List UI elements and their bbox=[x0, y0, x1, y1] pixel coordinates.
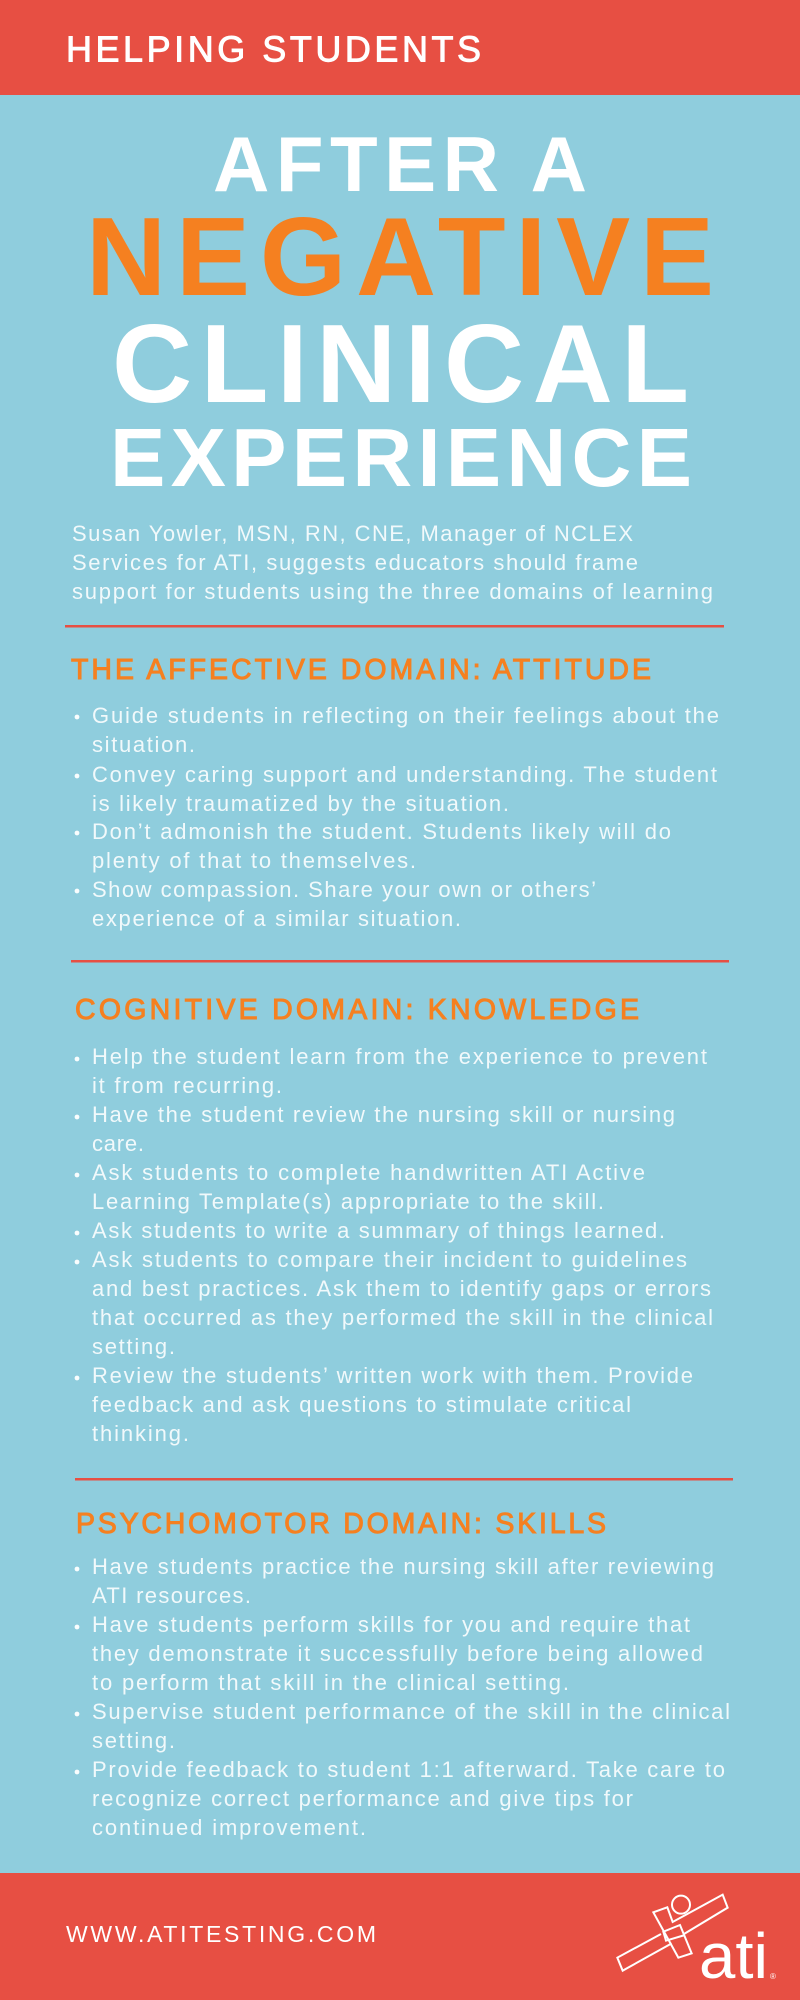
icon: ATI logo bbox=[617, 1895, 776, 1992]
bullet list: cognitive domain: Ask students to compare their incident to guidelines bbox=[92, 1247, 687, 1272]
bullet list: cognitive domain: care. bbox=[92, 1131, 144, 1156]
bullet list: affective domain: situation. bbox=[92, 732, 195, 757]
bullet list: cognitive domain: it from recurring. bbox=[92, 1073, 282, 1098]
bullet list: affective domain bbox=[75, 703, 719, 931]
icon: ATI logo: ® bbox=[770, 1972, 776, 1981]
bullet list: psychomotor domain: Provide feedback to student 1:1 afterward. Take care to bbox=[92, 1757, 725, 1782]
bullet list: affective domain: Show compassion. Share your own or others’ bbox=[92, 877, 596, 902]
bullet list: psychomotor domain: setting. bbox=[92, 1728, 175, 1753]
title: CLINICAL bbox=[112, 302, 689, 426]
header band bbox=[0, 0, 800, 95]
bullet list: cognitive domain: Help the student learn from the experience to prevent bbox=[92, 1044, 707, 1069]
intro text: Services for ATI, suggests educators should frame bbox=[72, 550, 638, 575]
bullet list: affective domain: Don’t admonish the student. Students likely will do bbox=[92, 819, 671, 844]
bullet list: psychomotor domain: recognize correct performance and give tips for bbox=[92, 1786, 633, 1811]
panel: affective domain bbox=[71, 654, 719, 931]
bullet list: affective domain: is likely traumatized by the situation. bbox=[92, 791, 509, 816]
bullet list: psychomotor domain: continued improvement. bbox=[92, 1815, 366, 1840]
bullet list: psychomotor domain: ATI resources. bbox=[92, 1583, 251, 1608]
intro text: support for students using the three domains of learning bbox=[72, 579, 713, 604]
bullet list: psychomotor domain bbox=[75, 1554, 730, 1840]
intro text bbox=[72, 521, 713, 604]
bullet list: cognitive domain: Learning Template(s) appropriate to the skill. bbox=[92, 1189, 604, 1214]
heading: psychomotor domain: PSYCHOMOTOR DOMAIN: SKILLS bbox=[76, 1508, 606, 1540]
intro text: Susan Yowler, MSN, RN, CNE, Manager of NCLEX bbox=[72, 521, 633, 546]
bullet list: psychomotor domain: Supervise student performance of the skill in the clinical bbox=[92, 1699, 730, 1724]
bullet list: cognitive domain: Ask students to complete handwritten ATI Active bbox=[92, 1160, 645, 1185]
bullet list: cognitive domain bbox=[75, 1044, 713, 1446]
bullet list: psychomotor domain: to perform that skill in the clinical setting. bbox=[92, 1670, 569, 1695]
bullet list: cognitive domain: Review the students’ written work with them. Provide bbox=[92, 1363, 693, 1388]
bullet list: affective domain: Guide students in reflecting on their feelings about the bbox=[92, 703, 719, 728]
bullet list: cognitive domain: Ask students to write a summary of things learned. bbox=[92, 1218, 665, 1243]
title: EXPERIENCE bbox=[110, 411, 692, 504]
bullet list: affective domain: experience of a similar situation. bbox=[92, 906, 461, 931]
bullet list: cognitive domain: Have the student review the nursing skill or nursing bbox=[92, 1102, 675, 1127]
website url: WWW.ATITESTING.COM bbox=[66, 1921, 376, 1947]
header label: HELPING STUDENTS bbox=[66, 28, 481, 70]
title bbox=[86, 120, 714, 504]
bullet list: psychomotor domain: Have students practice the nursing skill after reviewing bbox=[92, 1554, 714, 1579]
bullet list: cognitive domain: feedback and ask questions to stimulate critical bbox=[92, 1392, 631, 1417]
bullet list: cognitive domain: thinking. bbox=[92, 1421, 189, 1446]
title: AFTER A bbox=[213, 120, 587, 208]
bullet list: cognitive domain: that occurred as they performed the skill in the clinical bbox=[92, 1305, 713, 1330]
bullet list: affective domain: plenty of that to themselves. bbox=[92, 848, 416, 873]
bullet list: psychomotor domain: they demonstrate it successfully before being allowed bbox=[92, 1641, 703, 1666]
bullet list: cognitive domain: setting. bbox=[92, 1334, 175, 1359]
footer band bbox=[0, 1873, 800, 2000]
heading: cognitive domain: COGNITIVE DOMAIN: KNOWLEDGE bbox=[75, 994, 639, 1026]
panel: psychomotor domain bbox=[75, 1508, 730, 1840]
bullet list: cognitive domain: and best practices. Ask them to identify gaps or errors bbox=[92, 1276, 711, 1301]
panel: cognitive domain bbox=[75, 994, 713, 1446]
bullet list: psychomotor domain: Have students perform skills for you and require that bbox=[92, 1612, 690, 1637]
title: NEGATIVE bbox=[86, 195, 714, 319]
bullet list: affective domain: Convey caring support and understanding. The student bbox=[92, 762, 717, 787]
icon: ATI logo: ati bbox=[699, 1920, 768, 1992]
heading: affective domain: THE AFFECTIVE DOMAIN: ATTITUDE bbox=[71, 654, 651, 686]
